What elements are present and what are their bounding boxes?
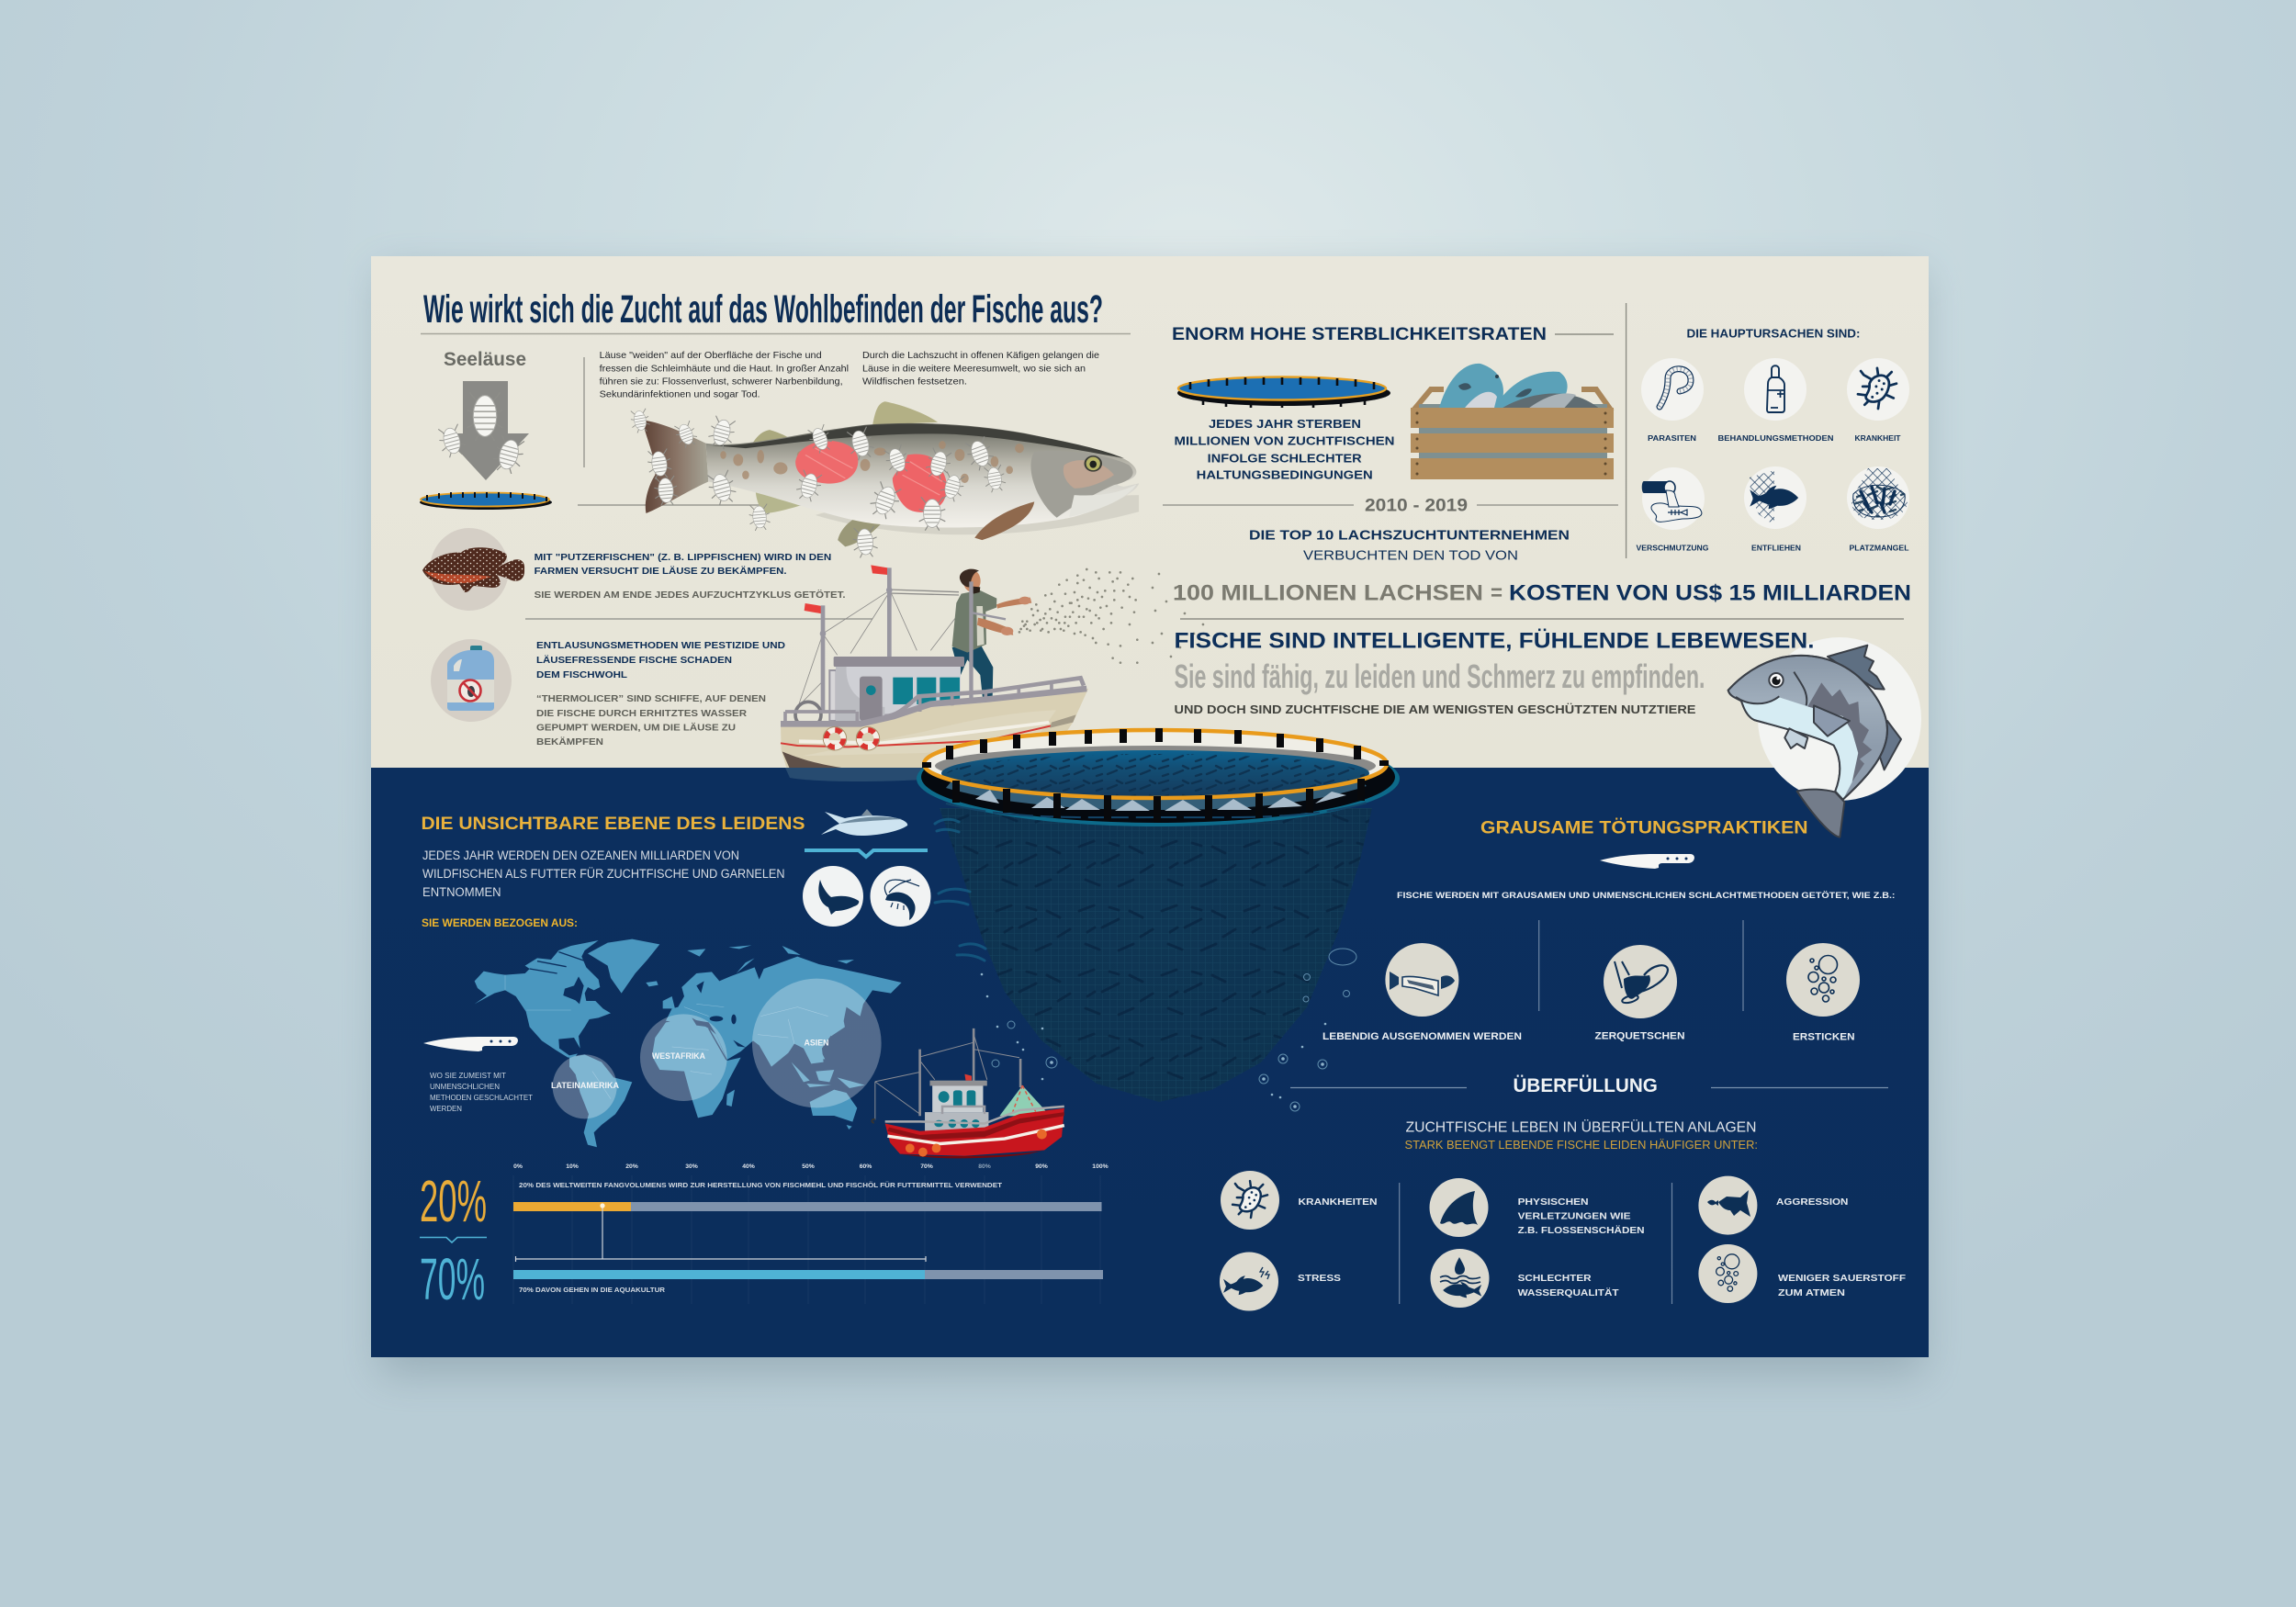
map labels <box>551 1038 828 1090</box>
panel: delousing methods <box>431 639 785 747</box>
icon: escaping fish <box>1744 466 1806 529</box>
caption: 20 percent: 20% DES WELTWEITEN FANGVOLUMENS WIRD ZUR HERSTELLUNG VON FISCHMEHL UND FISCHÖL FÜR FUTTERMITTEL VERWENDET <box>519 1181 1002 1189</box>
illustration: cartoon fish <box>1728 646 1901 837</box>
headline: 100 million salmon equals cost: 100 MILLIONEN LACHSEN <box>1173 581 1483 606</box>
text block: top 10 companies <box>1249 527 1570 564</box>
axis labels <box>513 1163 1109 1170</box>
illustration: crate of dead fish <box>1411 364 1614 479</box>
labels: causes row one: PARASITEN <box>1648 434 1696 443</box>
text block: millions die: MILLIONEN VON ZUCHTFISCHEN <box>1174 433 1394 448</box>
text block: slaughter methods: WERDEN <box>430 1105 462 1113</box>
rails and posts <box>922 728 1389 822</box>
icon: knife <box>1600 854 1694 869</box>
text block: lice explanation <box>600 350 849 400</box>
cabin <box>829 670 837 721</box>
map labels: WESTAFRIKA <box>652 1051 705 1061</box>
text block: wild fish as feed <box>422 848 784 899</box>
text block: delousing: LÄUSEFRESSENDE FISCHE SCHADEN <box>536 654 732 666</box>
heading: main causes: DIE HAUPTURSACHEN SIND: <box>1686 327 1861 340</box>
item: crushing <box>1594 945 1685 1041</box>
icon: shrimp in circle <box>871 866 931 927</box>
axis labels: 70% <box>920 1163 933 1170</box>
title: Wie wirkt sich die Zucht auf das Wohlbefinden der Fische aus? <box>423 287 1103 332</box>
axis labels: 40% <box>742 1163 755 1170</box>
text block: overcrowded facilities: STARK BEENGT LEBENDE FISCHE LEIDEN HÄUFIGER UNTER: <box>1405 1139 1758 1152</box>
country borders <box>505 975 828 1099</box>
heading: Seeläuse: Seeläuse <box>444 349 526 370</box>
icon: sardine <box>821 809 907 836</box>
axis labels: 50% <box>802 1163 815 1170</box>
text block: delousing <box>536 640 785 747</box>
text block: delousing: GEPUMPT WERDEN, UM DIE LÄUSE ZU <box>536 722 736 733</box>
axis labels: 20% <box>625 1163 638 1170</box>
heading: overcrowding: ÜBERFÜLLUNG <box>1514 1075 1658 1096</box>
icon: salmon in circle <box>803 866 863 927</box>
item: gutted alive: LEBENDIG AUSGENOMMEN WERDEN <box>1322 1031 1522 1042</box>
continents <box>475 939 902 1147</box>
item: gutted alive <box>1322 943 1522 1042</box>
icon: medicine bottle <box>1744 358 1806 421</box>
text block: millions die: JEDES JAHR STERBEN <box>1209 417 1361 431</box>
item: physical injuries <box>1429 1178 1645 1237</box>
panel: cleaner fish <box>422 528 846 611</box>
panel: mortality <box>1163 325 1618 564</box>
axis labels: 80% <box>978 1163 991 1170</box>
text block: lice explanation: fressen die Schleimhäute und die Haut. In großer Anzahl <box>600 364 849 375</box>
bubbles <box>981 949 1356 1111</box>
axis labels: 0% <box>513 1163 523 1170</box>
hull <box>781 689 1088 769</box>
text block: open cages: Durch die Lachszucht in offenen Käfigen gelangen die <box>862 350 1099 361</box>
masts <box>887 568 892 657</box>
chart: global catch usage <box>420 1163 1109 1312</box>
boat wires <box>799 590 959 705</box>
net wall <box>924 730 1387 798</box>
icon: pesticide jug <box>431 639 512 722</box>
net bag <box>940 808 1372 1102</box>
big number 20%: 20% <box>420 1168 487 1234</box>
inland seas <box>563 976 746 1048</box>
text block: open cages: Wildfischen festsetzen. <box>862 376 967 387</box>
panel: sea lice <box>420 349 1099 510</box>
bar: 20 percent <box>513 1202 1102 1211</box>
item: stress: STRESS <box>1298 1273 1341 1284</box>
icon: disease germ <box>1847 358 1909 421</box>
icon: wrasse in circle <box>422 528 524 611</box>
panel: invisible level of suffering <box>421 809 931 929</box>
item: less oxygen: ZUM ATMEN <box>1778 1287 1845 1298</box>
outer floating ring <box>917 731 1400 826</box>
panel: upper beige surface <box>371 256 1929 768</box>
map labels: ASIEN <box>805 1038 828 1047</box>
text block: delousing: “THERMOLICER” SIND SCHIFFE, AUF DENEN <box>536 693 766 704</box>
item: less oxygen: WENIGER SAUERSTOFF <box>1778 1273 1907 1284</box>
item: physical injuries: VERLETZUNGEN WIE <box>1518 1210 1631 1221</box>
subheading: sourced from: SIE WERDEN BEZOGEN AUS: <box>422 918 578 929</box>
icon: crowded net <box>1847 466 1909 529</box>
text block: lice explanation: Läuse "weiden" auf der Oberfläche der Fische und <box>600 350 822 361</box>
world map <box>475 939 902 1147</box>
circle behind cartoon fish <box>1758 637 1921 801</box>
text block: wild fish as feed: JEDES JAHR WERDEN DEN OZEANEN MILLIARDEN VON <box>422 848 739 862</box>
text block: open cages <box>862 350 1099 387</box>
panel: main causes <box>1637 327 1909 553</box>
item: diseases <box>1221 1171 1378 1230</box>
item: less oxygen <box>1698 1244 1907 1303</box>
item: poor water quality <box>1431 1249 1619 1308</box>
flags <box>871 565 888 575</box>
text block: millions die: INFOLGE SCHLECHTER <box>1208 452 1362 465</box>
fish swirl near net <box>935 819 985 961</box>
heading: invisible level: DIE UNSICHTBARE EBENE DES LEIDENS <box>421 814 805 834</box>
axis labels: 90% <box>1035 1163 1048 1170</box>
text block: delousing: DIE FISCHE DURCH ERHITZTES WASSER <box>536 708 747 719</box>
big number 70%: 70% <box>420 1246 485 1312</box>
headline: intelligent: FISCHE SIND INTELLIGENTE, FÜHLENDE LEBEWESEN. <box>1174 629 1815 654</box>
map labels: LATEINAMERIKA <box>551 1081 620 1090</box>
text block: millions die: HALTUNGSBEDINGUNGEN <box>1197 468 1373 482</box>
text block: millions die <box>1174 417 1394 482</box>
axis labels: 100% <box>1092 1163 1109 1170</box>
panel: overcrowding <box>1220 1075 1907 1311</box>
text block: wild fish as feed: WILDFISCHEN ALS FUTTER FÜR ZUCHTFISCHE UND GARNELEN <box>422 867 784 881</box>
icon: knife <box>423 1037 518 1051</box>
heading: mortality rates: ENORM HOHE STERBLICHKEITSRATEN <box>1172 325 1547 344</box>
text: slaughter intro: FISCHE WERDEN MIT GRAUSAMEN UND UNMENSCHLICHEN SCHLACHTMETHODEN GETÖTET, WIE Z.B.: <box>1397 891 1896 901</box>
illustration: net cage under water <box>917 728 1400 1111</box>
text block: lice explanation: führen sie zu: Flossenverlust, schwerer Narbenbildung, <box>600 376 843 387</box>
highlight circles <box>553 979 882 1118</box>
icon: small net cage <box>420 492 552 510</box>
illustration: salmon with lice and wounds <box>629 401 1139 558</box>
subheadline: capable of pain: Sie sind fähig, zu leiden und Schmerz zu empfinden. <box>1174 657 1705 695</box>
chart gridlines <box>513 1175 1100 1304</box>
item: suffocation: ERSTICKEN <box>1793 1032 1855 1043</box>
gunwale and railing <box>781 689 1086 724</box>
text block: least protected: UND DOCH SIND ZUCHTFISCHE DIE AM WENIGSTEN GESCHÜTZTEN NUTZTIERE <box>1174 702 1695 716</box>
heading: cruel killing practices: GRAUSAME TÖTUNGSPRAKTIKEN <box>1480 817 1807 838</box>
walkway <box>935 746 1376 786</box>
text block: top 10 companies: VERBUCHTEN DEN TOD VON <box>1303 548 1518 564</box>
item: poor water quality: WASSERQUALITÄT <box>1518 1287 1619 1298</box>
headline: 100 million salmon equals cost <box>1173 581 1911 606</box>
text block: delousing: DEM FISCHWOHL <box>536 669 628 680</box>
text block: overcrowded facilities: ZUCHTFISCHE LEBEN IN ÜBERFÜLLTEN ANLAGEN <box>1405 1119 1756 1136</box>
text block: slaughter methods: METHODEN GESCHLACHTET <box>430 1094 533 1102</box>
text block: slaughter methods: UNMENSCHLICHEN <box>430 1083 500 1091</box>
item: crushing: ZERQUETSCHEN <box>1594 1030 1685 1041</box>
third mast <box>969 581 974 702</box>
labels: causes row two <box>1637 544 1909 553</box>
text block: open cages: Läuse in die weitere Meeresumwelt, wo sie sich an <box>862 364 1086 375</box>
text block: cleaner fish: MIT "PUTZERFISCHEN" (Z. B. LIPPFISCHEN) WIRD IN DEN <box>535 552 831 563</box>
labels: causes row two: ENTFLIEHEN <box>1751 544 1801 553</box>
headline: 100 million salmon equals cost: = <box>1491 581 1503 606</box>
illustration: red trawler <box>872 1028 1064 1158</box>
text block: cleaner fish: SIE WERDEN AM ENDE JEDES AUFZUCHTZYKLUS GETÖTET. <box>535 589 846 601</box>
labels: causes row one: BEHANDLUNGSMETHODEN <box>1717 434 1834 443</box>
text block: slaughter methods: WO SIE ZUMEIST MIT <box>430 1072 506 1080</box>
man <box>952 643 993 699</box>
axis labels: 10% <box>566 1163 579 1170</box>
text block: slaughter methods <box>430 1072 533 1113</box>
life rings <box>823 727 880 750</box>
divider chevron <box>420 1238 487 1242</box>
heading: years: 2010 - 2019 <box>1365 496 1468 516</box>
icon: pollution pipe <box>1642 467 1705 530</box>
text block: delousing: BEKÄMPFEN <box>536 736 603 747</box>
caption: 70 percent: 70% DAVON GEHEN IN DIE AQUAKULTUR <box>519 1286 666 1294</box>
water with fish <box>941 750 1369 796</box>
divider chevron <box>805 850 928 857</box>
item: aggression <box>1698 1176 1848 1235</box>
panel: lower navy sea <box>371 768 1929 1357</box>
labels: causes row one <box>1648 434 1901 443</box>
item: suffocation <box>1786 943 1860 1043</box>
text block: overcrowded facilities <box>1405 1119 1758 1152</box>
text block: wild fish as feed: ENTNOMMEN <box>422 885 501 899</box>
item: physical injuries: PHYSISCHEN <box>1518 1197 1589 1208</box>
icon: parasite worm <box>1641 358 1704 421</box>
text block: top 10 companies: DIE TOP 10 LACHSZUCHTUNTERNEHMEN <box>1249 527 1570 544</box>
bracket connector <box>516 1203 926 1262</box>
illustration: work boat with worker <box>781 565 1088 769</box>
boat reflection <box>785 768 928 781</box>
bar: 70 percent <box>513 1270 1103 1279</box>
panel: cruel slaughter <box>1322 817 1896 1043</box>
text block: lice explanation: Sekundärinfektionen und sogar Tod. <box>600 389 760 400</box>
text block: cleaner fish: FARMEN VERSUCHT DIE LÄUSE ZU BEKÄMPFEN. <box>535 565 787 577</box>
item: physical injuries: Z.B. FLOSSENSCHÄDEN <box>1518 1224 1645 1236</box>
panel: fish are sentient <box>1174 629 1815 716</box>
axis labels: 30% <box>685 1163 698 1170</box>
text block: cleaner fish <box>535 552 846 601</box>
item: stress <box>1220 1253 1341 1311</box>
labels: causes row two: PLATZMANGEL <box>1850 544 1909 553</box>
panel shadow <box>380 272 1923 1374</box>
headline: 100 million salmon equals cost: KOSTEN VON US$ 15 MILLIARDEN <box>1509 581 1911 606</box>
text block: delousing: ENTLAUSUNGSMETHODEN WIE PESTIZIDE UND <box>536 640 785 651</box>
winch <box>795 702 821 727</box>
item: aggression: AGGRESSION <box>1776 1197 1848 1208</box>
item: poor water quality: SCHLECHTER <box>1518 1273 1592 1284</box>
item: diseases: KRANKHEITEN <box>1299 1197 1378 1208</box>
illustration: feed pellets <box>1019 569 1203 663</box>
axis labels: 60% <box>860 1163 872 1170</box>
arrow: lice falling into cage <box>436 381 529 480</box>
labels: causes row two: VERSCHMUTZUNG <box>1637 544 1708 553</box>
labels: causes row one: KRANKHEIT <box>1855 434 1901 443</box>
icon: net cage top view <box>1177 376 1390 408</box>
